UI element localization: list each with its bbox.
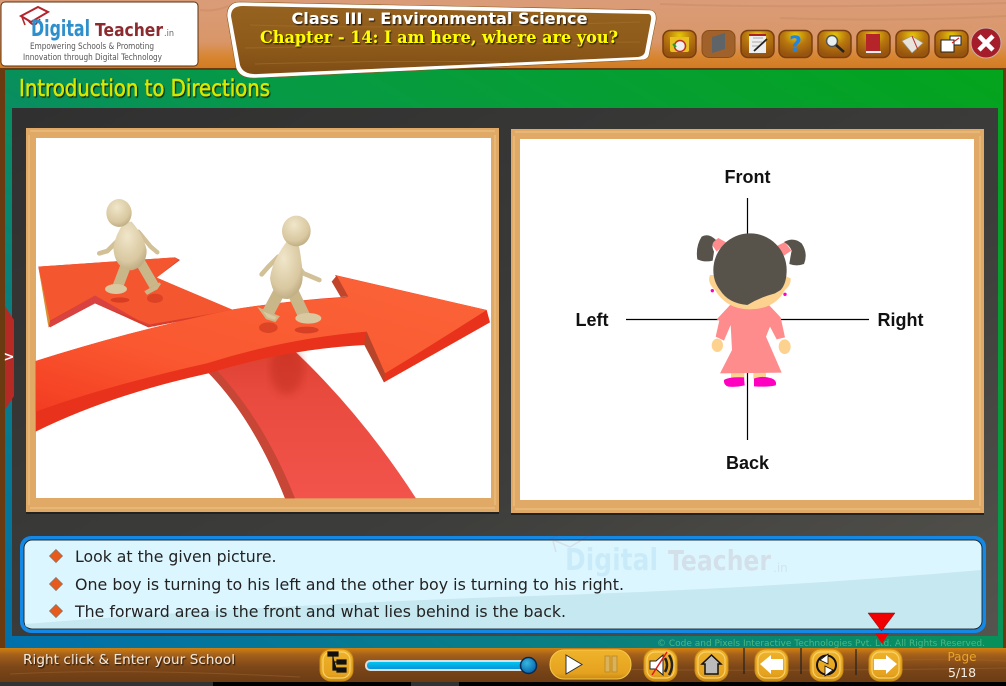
figure: right boy: [259, 216, 321, 333]
watermark logo: .in: [773, 561, 788, 575]
chapter title: Chapter - 14: I am here, where are you?: [260, 28, 618, 48]
school prompt: Right click & Enter your School: [23, 652, 235, 668]
progress slider: [365, 658, 536, 674]
button: help: [779, 30, 812, 58]
bullet 2: One boy is turning to his left and the other boy is turning to his right.: [75, 575, 624, 594]
button: replay: [810, 649, 843, 681]
left side tab: [4, 306, 14, 410]
dark chalkboard panel: [12, 108, 998, 636]
button: previous: [755, 649, 788, 681]
legs: [731, 372, 744, 379]
bullet list: [50, 547, 624, 621]
logo tagline: [23, 42, 162, 63]
left picture frame: [26, 128, 499, 514]
button: search: [818, 30, 851, 58]
logo wordmark: .in: [164, 29, 174, 39]
section heading: Introduction to Directions: [19, 76, 270, 102]
watermark logo: [551, 530, 788, 578]
button: timer folder: [663, 30, 696, 58]
class title: Class III - Environmental Science: [292, 9, 588, 28]
earrings: [711, 289, 714, 292]
label: Right: Right: [878, 310, 923, 330]
text note panel: [20, 530, 986, 633]
icon: graduation cap: [21, 7, 48, 25]
figure: left boy: [99, 199, 163, 303]
page counter: [947, 650, 977, 680]
button: open book: [896, 30, 929, 58]
logo card: [1, 2, 198, 66]
page counter: Page: [947, 650, 977, 664]
play pause control: [550, 650, 631, 679]
arrow: lower branch: [207, 347, 416, 498]
hair: [713, 233, 787, 305]
chapter title plaque: [227, 2, 656, 78]
button: help: ?: [789, 33, 802, 58]
button: close: [971, 28, 1001, 58]
separators: [744, 648, 856, 675]
hair bands: [711, 238, 727, 252]
watermark logo: Teacher: [668, 544, 771, 577]
page counter: 5/18: [948, 665, 976, 680]
wooden header bar: [0, 0, 1006, 70]
button: notes: [741, 30, 774, 58]
arms and hands: [712, 339, 723, 352]
logo tagline: Innovation through Digital Technology: [23, 53, 162, 63]
button: home: [695, 649, 728, 681]
label: Left: Left: [576, 310, 608, 330]
watermark logo: Digital: [565, 543, 658, 578]
shoes: [724, 377, 745, 387]
left side tab: >: [4, 350, 14, 365]
illustration: two figures on forked arrow: [36, 199, 490, 498]
button: dictionary: [857, 30, 890, 58]
button: next: [869, 649, 902, 681]
label: Front: Front: [725, 167, 770, 187]
logo wordmark: Digital: [31, 17, 90, 42]
direction axis lines: [626, 198, 869, 440]
copyright line: © Code and Pixels Interactive Technologies Pvt. Ltd. All Rights Reserved.: [657, 639, 985, 649]
arrow: left branch: [38, 257, 233, 327]
label: Back: Back: [726, 453, 770, 473]
right picture frame: [511, 129, 984, 515]
logo tagline: Empowering Schools & Promoting: [30, 42, 154, 52]
illustration: girl seen from behind: [697, 233, 806, 387]
bottom control bar: [0, 648, 1006, 686]
logo wordmark: [31, 17, 174, 42]
logo wordmark: Teacher: [95, 20, 163, 41]
button: window resize: [935, 30, 968, 58]
button: reference book: [702, 30, 735, 58]
neck and face edge: [709, 275, 791, 309]
bullet 1: Look at the given picture.: [75, 547, 276, 566]
dress: [716, 304, 785, 373]
bullet 3: The forward area is the front and what lies behind is the back.: [74, 602, 566, 621]
button: mute: [644, 649, 677, 681]
toolbar icons: [663, 28, 1001, 58]
pigtails: [697, 235, 716, 261]
red pointer arrow: [868, 613, 895, 644]
button: table of contents: [320, 649, 353, 681]
arrow: main arrow: [36, 275, 490, 432]
